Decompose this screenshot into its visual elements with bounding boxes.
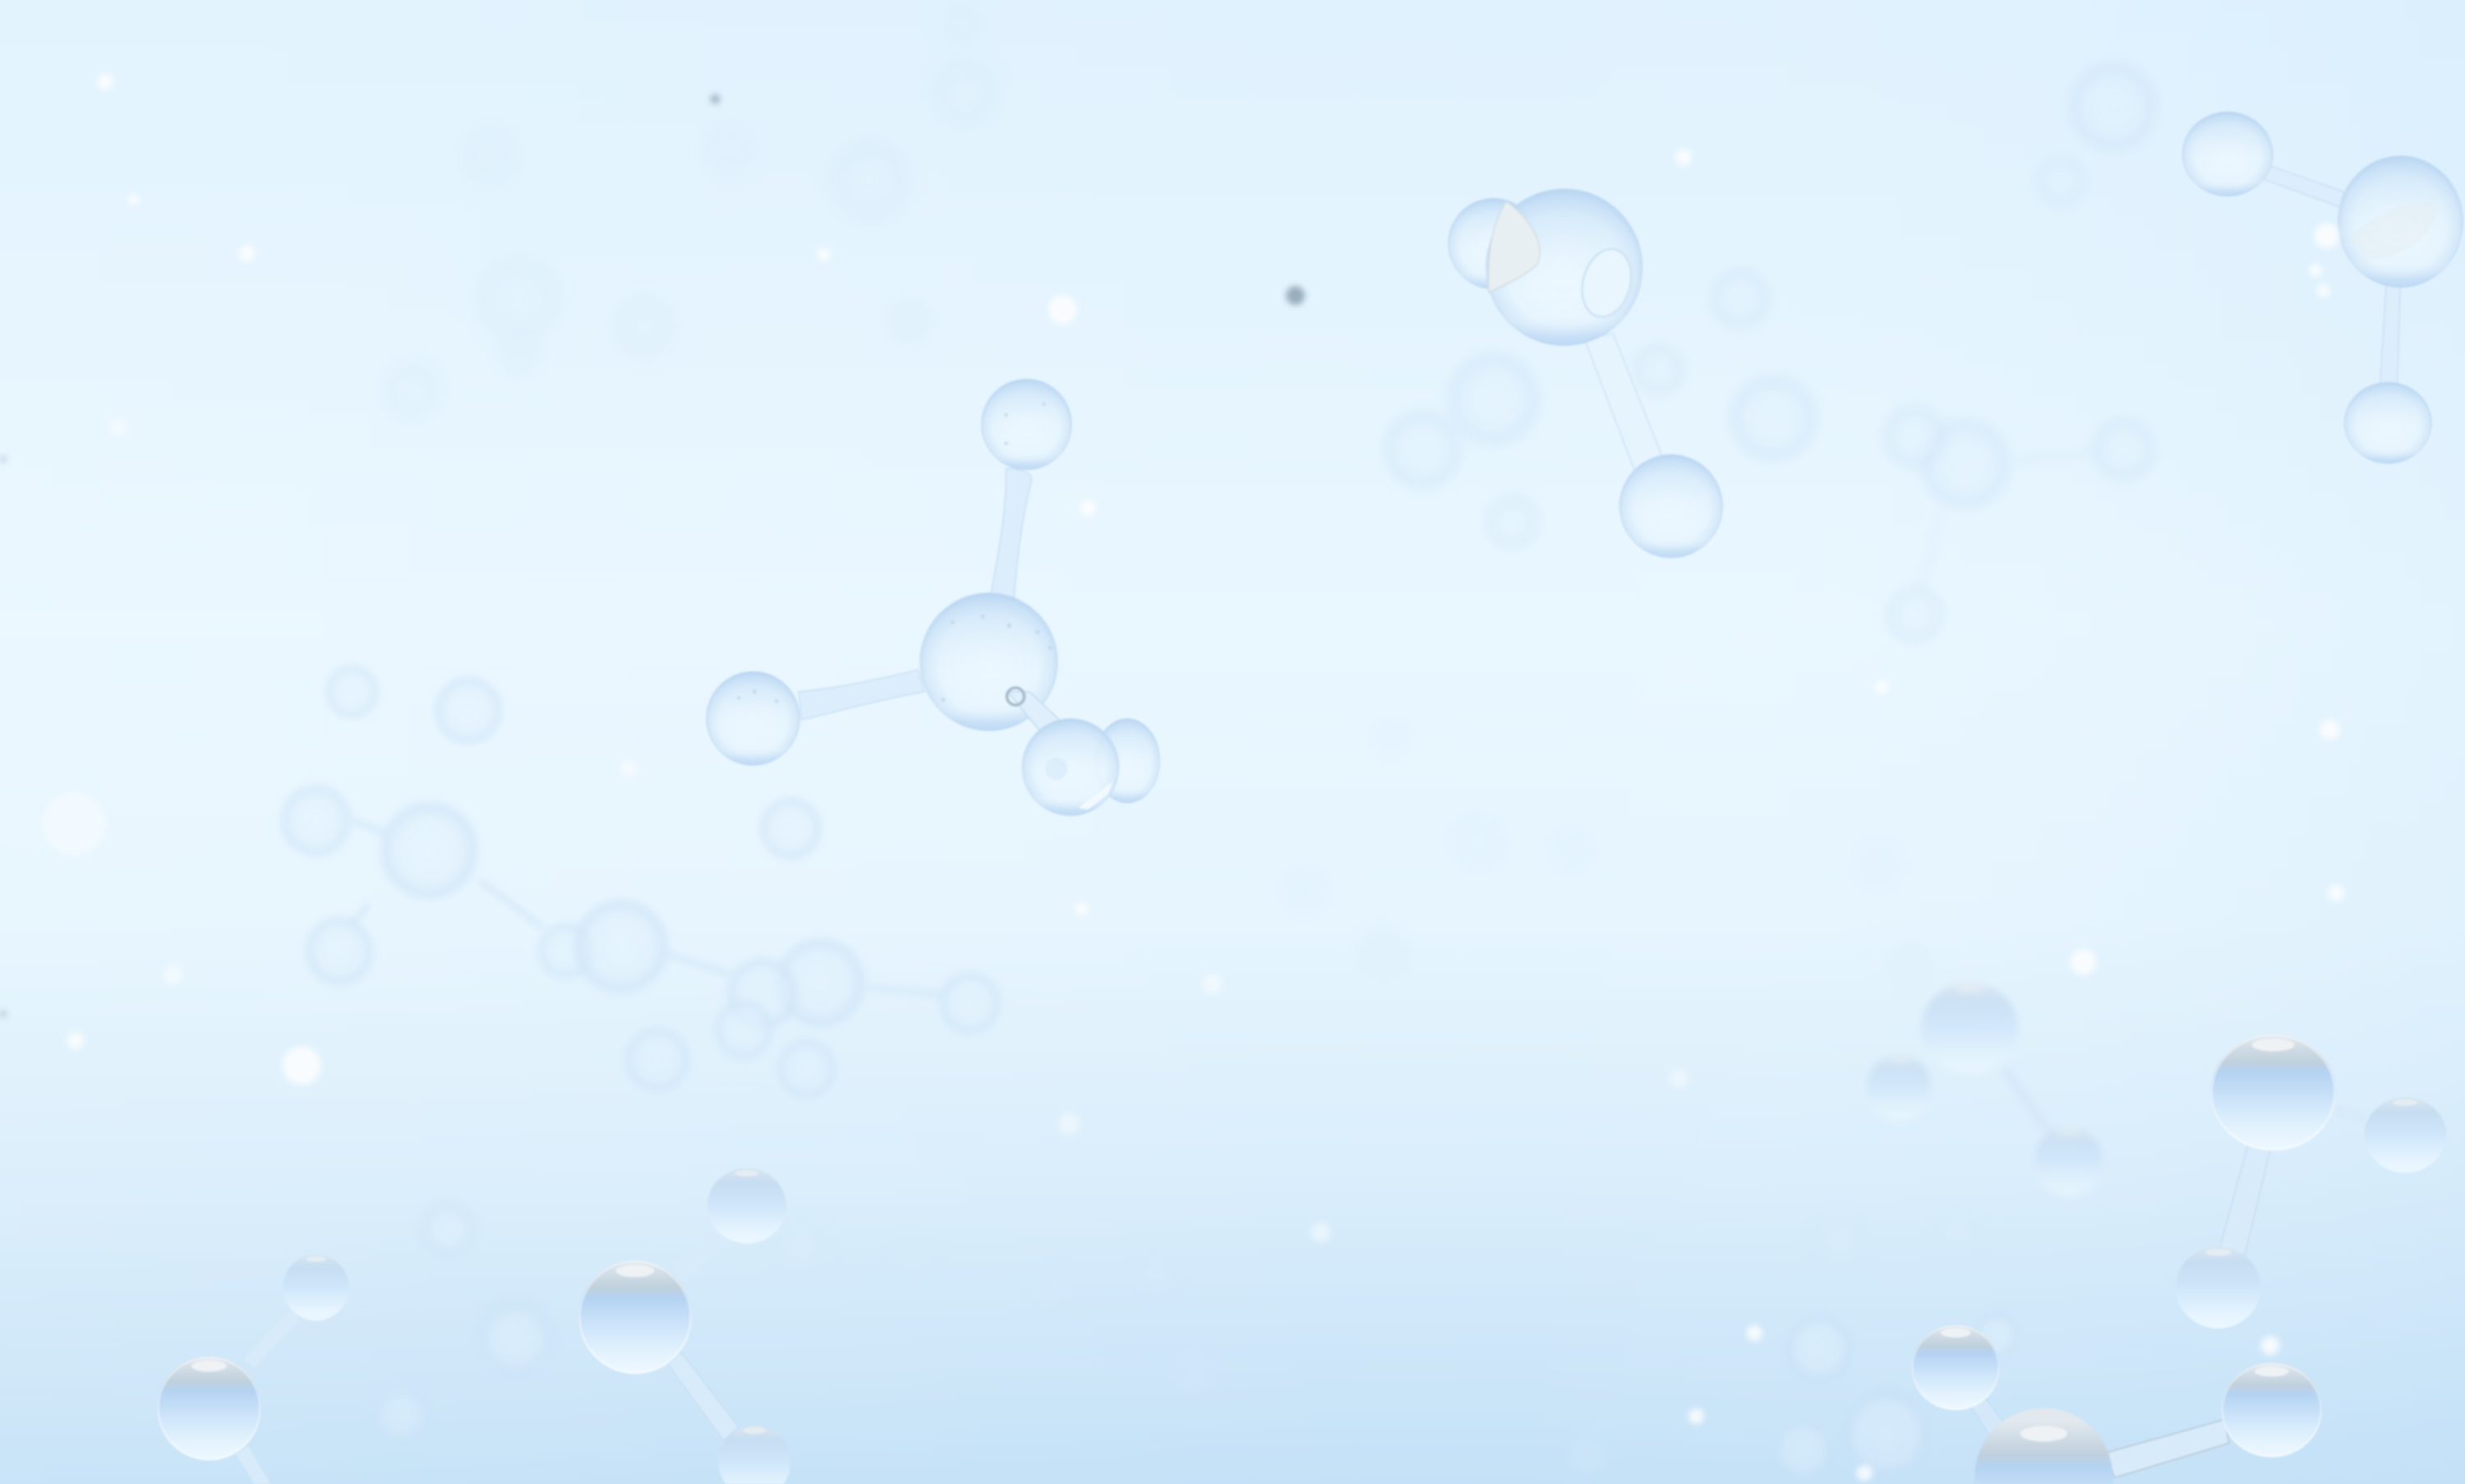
blurred molecule: lower left background	[371, 1201, 556, 1445]
blurred molecule: lower right background	[1772, 1311, 2021, 1481]
sphere: large	[2210, 1035, 2336, 1150]
sphere: left	[706, 671, 800, 766]
molecule: far top right	[2182, 112, 2463, 463]
bonds	[671, 1229, 723, 1281]
molecule: bottom far left	[157, 1255, 349, 1484]
sphere: small overlapping	[1448, 198, 1539, 289]
sphere: lower, cut by the frame	[718, 1426, 790, 1484]
sphere: bottom, cut by the frame	[1974, 1408, 2113, 1484]
sphere: back right	[1094, 718, 1160, 804]
sphere: large	[578, 1260, 692, 1374]
dark dust specks	[0, 94, 1305, 1017]
sphere: top	[981, 379, 1072, 470]
sphere: left	[2182, 112, 2274, 196]
bond: left	[799, 670, 924, 720]
sphere: large	[157, 1357, 261, 1460]
molecule: upper centre right	[1448, 189, 1723, 558]
sphere: large	[2338, 155, 2463, 288]
sphere: right	[2221, 1363, 2322, 1457]
sphere: right	[2365, 1097, 2446, 1173]
molecule: bottom right	[1912, 1325, 2322, 1484]
bond: front	[1007, 692, 1062, 735]
bond	[1585, 334, 1663, 472]
blurred molecules: top left	[382, 2, 998, 422]
sphere: upper	[1912, 1325, 2000, 1410]
sphere: lower	[2344, 382, 2432, 463]
bonds	[244, 1310, 299, 1367]
sphere: lower	[1620, 454, 1723, 558]
sphere: large	[1486, 189, 1643, 346]
refraction inside large sphere	[1488, 201, 1540, 293]
bond: behind	[1025, 707, 1069, 735]
blurred molecules: faint centre and bottom	[773, 718, 1983, 1481]
bond: top	[990, 468, 1031, 601]
blurred molecule cluster: upper middle right	[1382, 60, 2160, 644]
molecule: bottom centre left	[578, 1168, 790, 1484]
blurred molecule: mid right	[1866, 983, 2103, 1196]
bonds	[1968, 1396, 2016, 1446]
main molecule: centre	[706, 379, 1160, 816]
sphere: lower	[2176, 1247, 2260, 1329]
sphere: upper	[707, 1168, 786, 1243]
molecule: lower right	[2176, 1035, 2446, 1329]
blurred molecule chain: middle left	[279, 663, 1003, 1100]
sphere: front right	[1022, 718, 1119, 816]
bonds	[2220, 1145, 2270, 1255]
sphere: upper	[283, 1255, 349, 1320]
sphere: centre	[919, 592, 1058, 731]
bonds	[2264, 164, 2344, 208]
